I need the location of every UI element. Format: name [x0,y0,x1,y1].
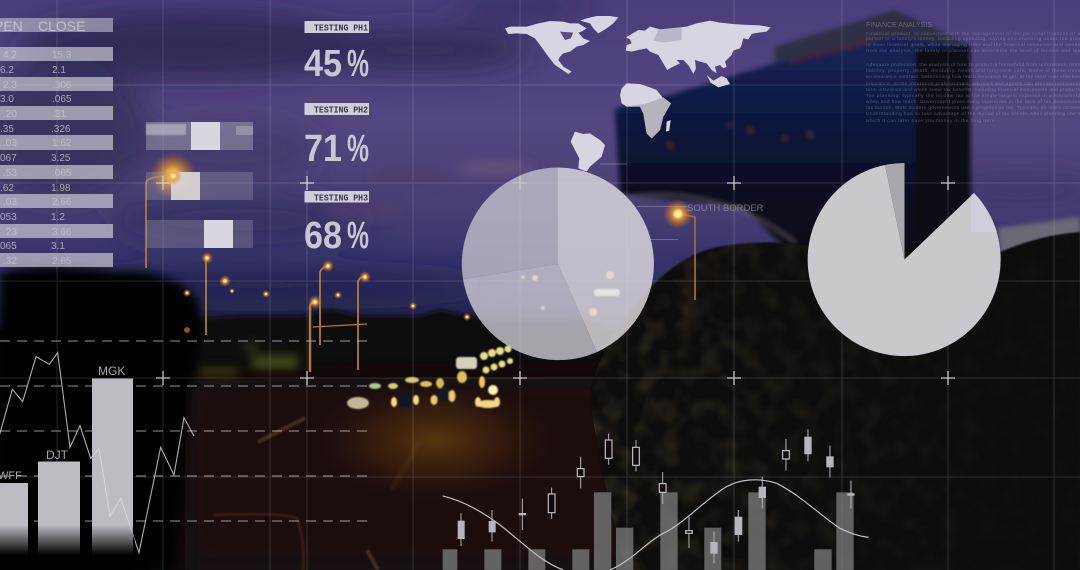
volume bars [443,492,854,570]
finance analysis text block: which it can later save you money in the long term. [866,118,996,124]
table values on striped rows: 3.66 [52,227,72,238]
finance analysis text block: an insurance contract. Determining how much insurance to get, at the most cost effective [866,74,1080,80]
vertical dashed marker [728,380,741,570]
stat: testing PH1 45%: TESTING PH1 [314,24,369,34]
candlestick and volume chart bottom right [443,380,869,570]
table values on plain rows: .326 [51,124,71,135]
stat: testing PH1 45%: % [347,43,369,85]
table values on striped rows: .23 [3,227,17,238]
table values on plain rows: 3.1 [51,241,65,252]
table values on plain rows: 1.2 [51,212,65,223]
table striped rows [0,47,113,267]
stat: testing PH2 71%: 71 [304,128,342,170]
background: building [615,10,1080,262]
table values on striped rows: .20 [3,109,17,120]
heat strips [146,122,253,248]
table values on plain rows: 6.2 [0,65,14,76]
bar: DJT: DJT [46,448,69,462]
finance analysis text block: liability, property, death, disability, health and long-term care. Some of these risks [866,68,1080,74]
table values on striped rows: 2.66 [52,197,72,208]
stat: testing PH1 45%: 45 [304,43,342,85]
table values on striped rows: .53 [3,168,17,179]
heat strip 1 [146,122,253,150]
stat: testing PH2 71%: % [347,128,369,170]
table values on striped rows: .065 [52,168,72,179]
table header row [0,18,113,34]
label: south border [600,164,764,240]
table values on striped rows [3,50,72,267]
background: dusk sky with clouds [0,0,1080,330]
finance analysis text block: insurance. Some insurance professionals, advisors and agents can provide retirement [866,81,1080,87]
table values on plain rows: .065 [52,94,72,105]
stat: testing PH1 45% [304,21,369,85]
finance analysis text block: to meet financial goals, while managing risks and the financial resources and needs [866,42,1080,48]
bar: MGK [92,364,133,570]
stat: testing PH3 68%: % [347,215,369,257]
stat: testing PH3 68% [304,191,369,257]
background: dark ground and road [0,309,1080,570]
pie chart right [808,163,1001,356]
finance analysis text block [866,22,1080,124]
pie upper-right highlight [971,193,997,232]
finance analysis text block: FINANCE ANALYSIS [866,22,932,29]
pie main slice [808,165,1001,356]
world map [505,16,771,172]
bar and line chart bottom left [0,341,372,570]
bar: DJT [38,448,80,570]
table values on plain rows: 067 [0,153,17,164]
label: south border: SOUTH BORDER [687,203,764,214]
ghosted lights inside pie [521,271,620,316]
finance analysis text block: from the analysis, the family or planner can determine the level of income and tax [866,48,1080,54]
table values on plain rows: 065 [0,241,17,252]
map: Eurasia [626,21,771,74]
map: North America [505,21,590,74]
table values on plain rows: 3.25 [51,153,71,164]
table values on striped rows: 2.65 [52,256,72,267]
line series [0,353,194,553]
heat strip 2 [146,172,253,200]
finance analysis text block: Adequate protection: the analysis of how to protect a household from unforeseen risks [866,62,1080,68]
outlined candles [548,440,789,533]
heat strip 3 [146,220,253,248]
stat: testing PH3 68%: 68 [304,215,342,257]
map: Africa [620,83,671,138]
table values on striped rows: .306 [52,80,72,91]
stat: testing PH2 71% [304,103,369,170]
candle wicks [461,429,851,563]
table values on striped rows: 4.2 [3,50,17,61]
finance analysis text block: Understanding how to take advantage of the myriad of tax breaks when planning one's [866,111,1080,117]
finance analysis text block: when and how much. Government gives many incentives in the form of tax deductions [866,99,1080,105]
background: traffic and roadside greenery [200,343,513,409]
finance analysis text block: Tax planning: typically the income tax is the single largest expense in a household [866,93,1080,99]
table values on plain rows: .35 [0,124,14,135]
background: street lamps [146,152,695,372]
finance analysis text block: term insurance and whole some tax benefits, including financial instruments and products [866,87,1080,93]
table values on striped rows: 2.3 [3,80,17,91]
table values on plain rows: 1.98 [51,183,71,194]
table header row: CLOSE [38,18,85,34]
filled candles [458,437,855,554]
data table: open and close values [0,18,113,267]
dashed guide lines [0,341,372,521]
table values on plain rows: 3.0 [0,94,14,105]
finance analysis text block: tax burden. Most modern governments use a progressive tax. Typically, as one's income [866,105,1080,111]
pie slice: top left [462,168,558,279]
map: Greenland [580,16,618,33]
map: South America [571,132,605,172]
table values on striped rows: .32 [3,256,17,267]
trend curve [443,480,869,570]
table values on striped rows: 1.62 [52,138,72,149]
table values on striped rows: .03 [3,197,17,208]
stat: testing PH2 71%: TESTING PH2 [314,106,368,116]
table values on striped rows: 15.3 [52,50,72,61]
stat block: testing phases [304,21,369,257]
table values on plain rows: .62 [0,183,14,194]
bar: WFF [0,470,28,570]
table values on striped rows: .31 [52,109,66,120]
lamp glare over heat strip [164,167,182,185]
table values on striped rows: .03 [3,138,17,149]
pie slice: bottom left [463,264,597,360]
map: Southeast Asia islands [707,75,730,87]
pie chart left [462,168,654,360]
pie slice: right [558,168,654,352]
bottom fade over bars [0,525,135,555]
horizontal dashed marker [678,376,726,390]
stat: testing PH3 68%: TESTING PH3 [314,194,368,204]
background: tree lines [0,230,1080,570]
finance analysis text block: person or a family's money, including spending, saving and investing under the plan [866,36,1080,42]
table values on plain rows: 053 [0,212,17,223]
bar: MGK: MGK [98,364,125,378]
pie darker narrow slice [885,163,904,260]
table values on plain rows [0,65,72,252]
map: Madagascar [666,120,671,132]
table values on plain rows: 2.1 [52,65,66,76]
finance analysis text block: Financial product. Is concerned with the management of the personal finances of a [866,31,1080,37]
